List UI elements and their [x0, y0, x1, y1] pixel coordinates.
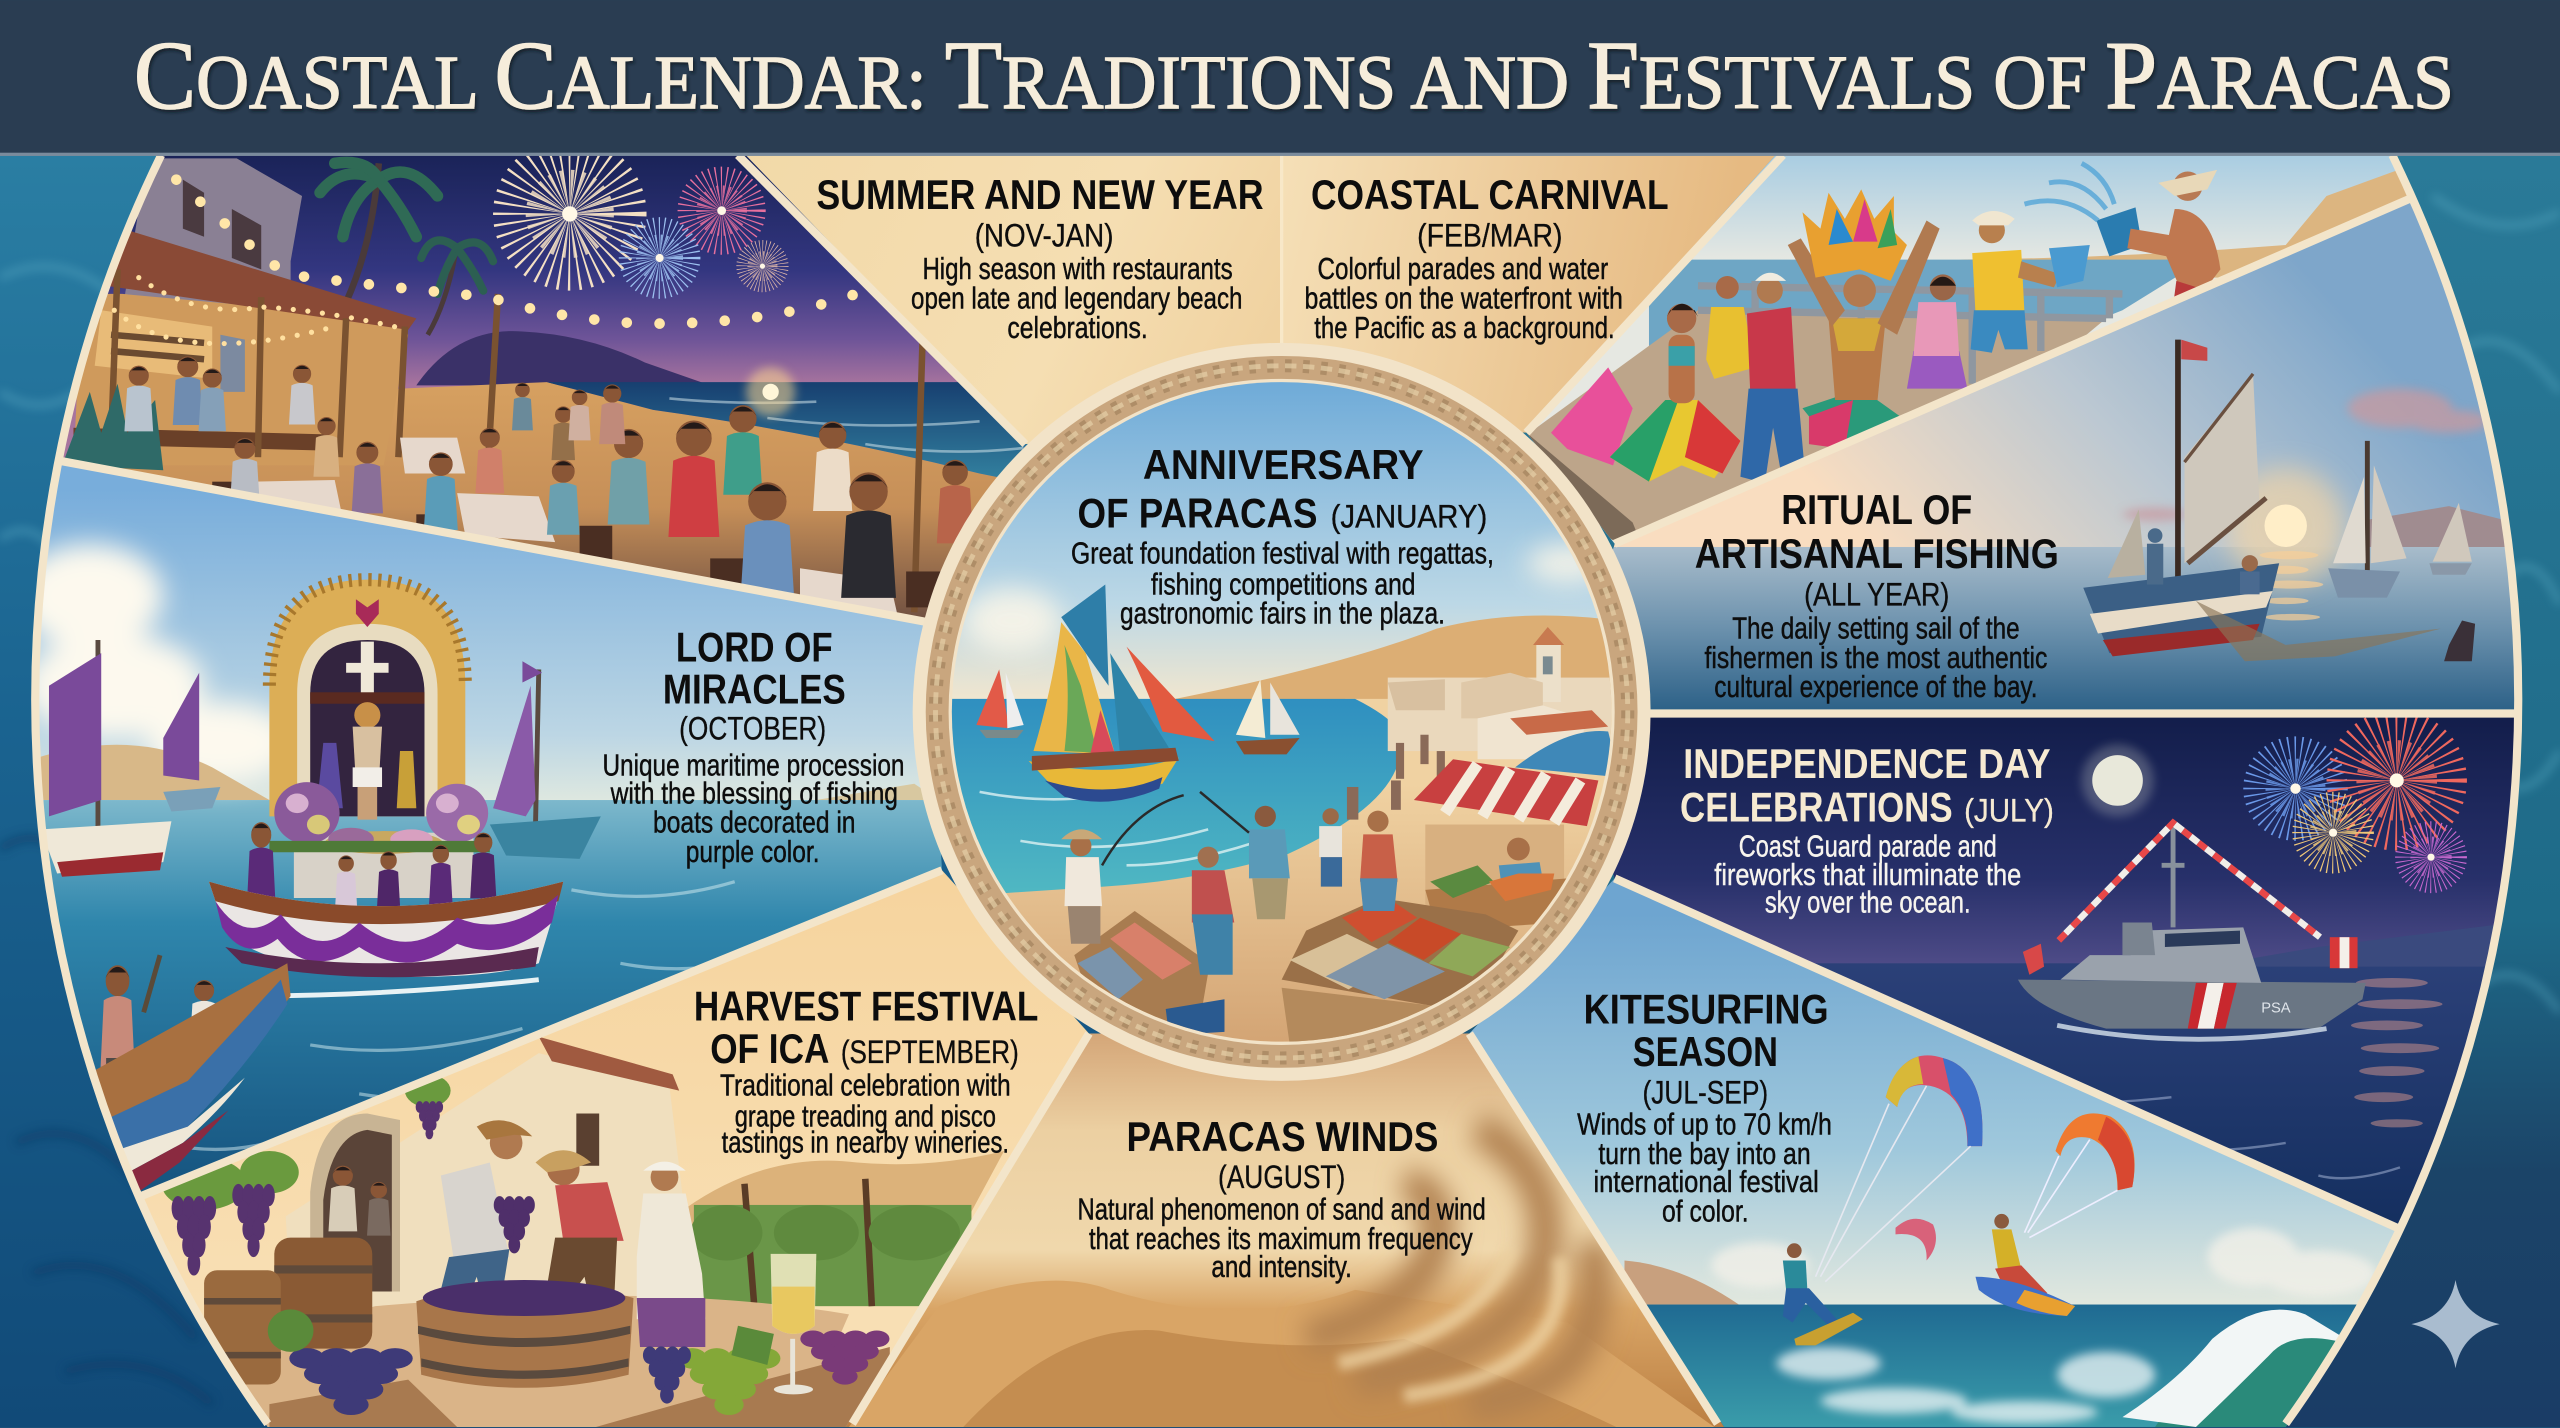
panel: summer night beach scene [63, 156, 1026, 618]
text: harvest festival: OF ICA [710, 1025, 829, 1072]
text: summer and new year [816, 171, 1264, 345]
text: paracas winds: and intensity. [1211, 1251, 1352, 1284]
beach bar building [125, 158, 302, 304]
kitesurfer two [1976, 1214, 2075, 1316]
treading tub [416, 1280, 633, 1388]
vines [162, 1074, 451, 1210]
center fish crates [1074, 898, 1518, 1045]
central medallion: anniversary of paracas [913, 343, 1651, 1081]
text: ritual of artisanal fishing: The daily setting sail of the [1732, 612, 2020, 645]
main carnival dancer [1802, 389, 1907, 451]
text: paracas winds [1078, 1113, 1486, 1284]
clouds [16, 544, 294, 784]
hill [1624, 1260, 1739, 1305]
background figures [328, 1166, 391, 1236]
left sail boat [41, 640, 171, 877]
header bar [0, 0, 2560, 155]
vineyard [694, 1205, 971, 1306]
center clouds [963, 544, 1608, 653]
crates [596, 1347, 890, 1427]
panel: independence day scene [1567, 714, 2547, 1298]
dunes [849, 1281, 1714, 1427]
small rowing boat [82, 955, 291, 1200]
text: summer and new year: SUMMER AND NEW YEAR [816, 171, 1264, 218]
center crowd [1347, 735, 1445, 820]
panel: artisanal fishing scene [1567, 163, 2547, 718]
text: independence day celebrations [1680, 740, 2054, 920]
panel: kitesurfing scene [1453, 865, 2449, 1427]
yellow shirt man [1972, 250, 2024, 314]
text: anniversary of paracas: (JANUARY) [1331, 497, 1487, 534]
text: harvest festival: HARVEST FESTIVAL [694, 982, 1038, 1029]
pink and purple dancer [1907, 351, 1967, 389]
text: coastal carnival: (FEB/MAR) [1417, 217, 1562, 254]
center sand [947, 699, 1616, 1045]
text: kitesurfing season: of color. [1662, 1195, 1749, 1228]
text: coastal carnival: the Pacific as a background. [1314, 312, 1615, 345]
text: ritual of artisanal fishing: cultural experience of the bay. [1714, 671, 2038, 704]
far sail boat [163, 673, 220, 811]
third boat [2429, 503, 2472, 575]
sparkle star [2411, 1280, 2500, 1368]
center sea [947, 699, 1404, 895]
tables and diners [253, 438, 898, 617]
text: anniversary of paracas [1071, 441, 1494, 631]
panel: lord of miracles scene [0, 441, 980, 1274]
text: independence day celebrations: sky over the ocean. [1765, 887, 1971, 920]
barrels [204, 1238, 372, 1385]
text: lord of miracles: MIRACLES [663, 666, 846, 713]
text: independence day celebrations: CELEBRATIONS [1680, 783, 1953, 830]
text: kitesurfing season: international festival [1593, 1166, 1819, 1199]
panel: summer and new year wedge [746, 156, 1280, 444]
processional shrine [269, 580, 473, 898]
text: lord of miracles: boats decorated in [653, 807, 856, 840]
text: anniversary of paracas: OF PARACAS [1078, 489, 1318, 536]
text: anniversary of paracas: gastronomic fairs in the plaza. [1120, 598, 1445, 631]
ground [245, 1296, 849, 1427]
fisherman in the water [2444, 620, 2475, 661]
left pink skirt dancer [1551, 367, 1633, 465]
palm trees [320, 162, 493, 335]
text: kitesurfing season: KITESURFING [1584, 986, 1829, 1033]
distant hills [33, 745, 269, 800]
plant [62, 384, 163, 470]
panel: carnival scene [1526, 156, 2407, 544]
waves [163, 882, 800, 1149]
text: anniversary of paracas: fishing competitions and [1151, 568, 1416, 601]
kitesurfer one [1783, 1243, 1863, 1345]
center man [1747, 307, 1796, 392]
small distant kite [1896, 1219, 1936, 1260]
farmhouse [286, 1053, 694, 1388]
text: ritual of artisanal fishing: ARTISANAL FISHING [1695, 530, 2059, 577]
fireworks [531, 176, 795, 416]
text: lord of miracles [602, 623, 904, 869]
text: ritual of artisanal fishing: RITUAL OF [1781, 486, 1972, 533]
text: coastal carnival: battles on the waterfront with [1304, 283, 1623, 316]
figures on boat [247, 822, 496, 911]
center village [1388, 627, 1616, 759]
text: kitesurfing season: turn the bay into an [1598, 1138, 1811, 1171]
sand [121, 382, 997, 618]
text: coastal carnival [1304, 171, 1669, 345]
pouring man [2165, 209, 2220, 291]
text: ritual of artisanal fishing: fishermen is the most authentic [1704, 642, 2047, 675]
treading farmers [438, 1120, 705, 1347]
text: paracas winds: Natural phenomenon of sand and wind [1078, 1194, 1486, 1227]
text: anniversary of paracas: Great foundation festival with regattas, [1071, 537, 1494, 570]
text: ritual of artisanal fishing [1695, 486, 2059, 704]
text: summer and new year: (NOV-JAN) [975, 217, 1113, 254]
second boat [2328, 441, 2407, 598]
railing [1698, 281, 2122, 384]
string lights [176, 180, 865, 324]
text: kitesurfing season: SEASON [1633, 1028, 1778, 1075]
panel: paracas winds scene [833, 1029, 1747, 1427]
text: coastal carnival: COASTAL CARNIVAL [1311, 171, 1669, 218]
panel: harvest festival scene [131, 865, 1110, 1427]
procession boat [209, 882, 563, 996]
clouds [1711, 1228, 2376, 1296]
text: independence day celebrations: Coast Guard parade and [1739, 830, 1997, 863]
text: summer and new year: celebrations. [1007, 312, 1148, 345]
dancers [1551, 170, 2220, 483]
fishing net [2196, 601, 2441, 661]
flowers [269, 782, 490, 854]
sea [547, 382, 1025, 477]
text: summer and new year: open late and legendary beach [911, 283, 1242, 316]
boardwalk [1528, 310, 2102, 530]
sun reflection [2258, 551, 2323, 620]
text: paracas winds: (AUGUST) [1218, 1158, 1345, 1195]
text: independence day celebrations: INDEPENDENCE DAY [1683, 740, 2051, 787]
center figures [1061, 792, 1398, 975]
grapes in hand [494, 1196, 535, 1253]
text: kitesurfing season [1577, 986, 1832, 1228]
breaking wave [1776, 1310, 2400, 1427]
center small red sail boat [976, 669, 1024, 738]
distant hills [686, 1151, 1004, 1257]
text: harvest festival [694, 982, 1038, 1160]
text: kitesurfing season: Winds of up to 70 km/h [1577, 1109, 1832, 1142]
headland [2351, 506, 2514, 547]
text: lord of miracles: Unique maritime procession [602, 750, 904, 783]
text: harvest festival: (SEPTEMBER) [841, 1033, 1019, 1070]
reflection on water [2351, 978, 2442, 1127]
center colorful sail boat [1029, 585, 1215, 802]
text: independence day celebrations: fireworks that illuminate the [1714, 859, 2021, 892]
text: lord of miracles: LORD OF [676, 623, 833, 670]
title: COASTAL CALENDAR: TRADITIONS AND FESTIVALS OF PARACAS [134, 22, 2454, 130]
sea band [1649, 260, 2176, 346]
fireworks [2269, 745, 2449, 875]
wine glass [771, 1254, 816, 1394]
center stall [1414, 731, 1620, 931]
text: paracas winds: that reaches its maximum frequency [1089, 1223, 1473, 1256]
mountains [416, 331, 710, 385]
text: summer and new year: High season with restaurants [922, 253, 1233, 286]
center hills [1176, 615, 1616, 735]
foreground grapes [268, 1309, 889, 1415]
text: harvest festival: Traditional celebration with [720, 1070, 1011, 1103]
hanging grapes [172, 1101, 443, 1276]
right sail boat [490, 661, 601, 859]
text: harvest festival: grape treading and pisco [735, 1101, 996, 1134]
text: anniversary of paracas: ANNIVERSARY [1143, 441, 1424, 488]
text: independence day celebrations: (JULY) [1964, 791, 2054, 828]
main fishing boat [2083, 340, 2279, 656]
panel: coastal carnival wedge [1283, 156, 1775, 433]
center white sail boat [1236, 679, 1300, 754]
hill [2204, 922, 2514, 967]
moon [2082, 745, 2153, 816]
text: lord of miracles: with the blessing of fishing [610, 777, 898, 810]
text: harvest festival: tastings in nearby wineries. [722, 1127, 1009, 1160]
text: kitesurfing season: (JUL-SEP) [1642, 1074, 1768, 1111]
sun glow [2227, 467, 2344, 585]
water splash [2024, 163, 2114, 220]
ship: PSA [2261, 1000, 2291, 1016]
ship [2018, 823, 2366, 1039]
text: lord of miracles: purple color. [686, 836, 820, 869]
center sky [947, 376, 1616, 702]
rainbow skirt dancer [1610, 400, 1740, 482]
sunset clouds [2122, 389, 2490, 521]
sand swirl [1306, 1127, 1595, 1404]
woman in yellow behind [1706, 307, 1750, 379]
hill [1959, 163, 2416, 278]
big kite [1816, 1055, 1983, 1282]
text: coastal carnival: Colorful parades and water [1318, 253, 1608, 286]
second kite [2024, 1113, 2135, 1238]
text: paracas winds: PARACAS WINDS [1127, 1113, 1438, 1160]
text: ritual of artisanal fishing: (ALL YEAR) [1804, 576, 1949, 613]
text: lord of miracles: (OCTOBER) [679, 710, 826, 747]
